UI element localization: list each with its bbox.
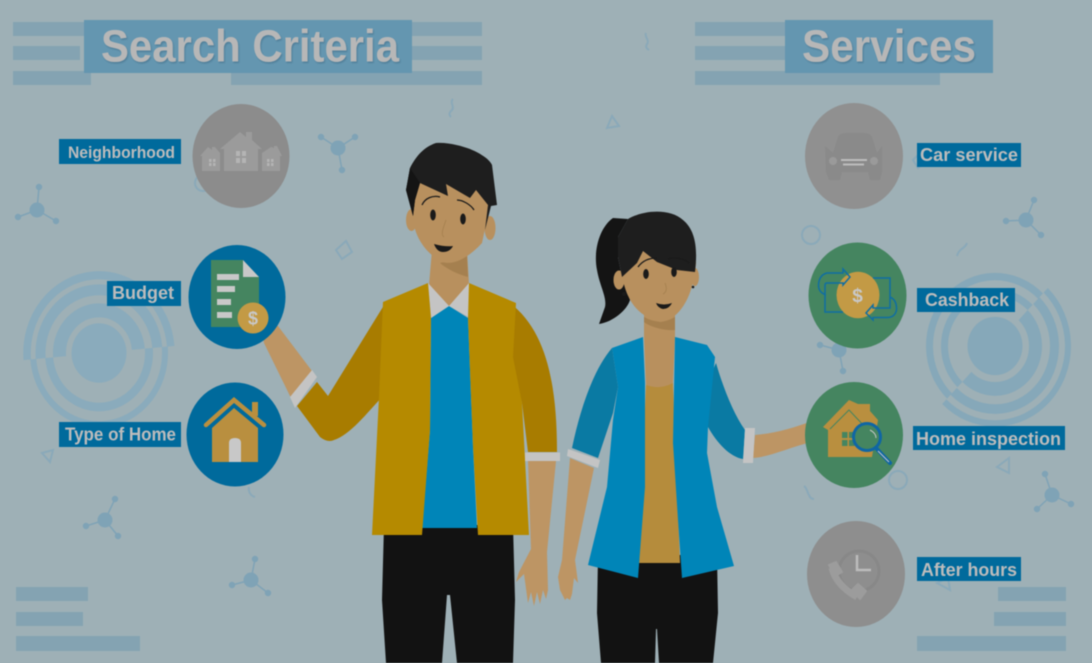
man: left sleeve [297,302,386,441]
man: eyebrows [422,196,474,210]
woman: left cuff [567,449,600,468]
label: Budget: Budget [112,283,174,303]
icon: budget [188,245,286,349]
woman: right jacket panel [673,337,734,578]
right decorative bars behind title [695,22,940,85]
label: Neighborhood [59,139,181,164]
woman: earrings [622,286,694,296]
icon: budget: $ [248,308,258,328]
woman: neck shadow [644,317,675,330]
icon: car service [805,103,903,209]
woman: eyes [643,267,677,279]
background decoration: right concentric rings [897,242,1092,455]
background decoration: left concentric rings [21,269,176,431]
man: face [414,170,491,263]
man: nose [442,220,446,237]
man: right sleeve [510,303,557,452]
man: raised arm [262,326,312,398]
icon: home inspection [805,382,903,488]
man figure [262,143,560,663]
icon: type of home [186,382,284,486]
woman: face [621,235,696,322]
icon: neighborhood [192,104,290,208]
woman: neck and chest [644,315,675,387]
woman: ponytail [596,218,630,324]
woman: top [639,383,680,563]
background decoration: small shapes [42,33,1009,590]
man: jacket left [372,283,431,535]
icon: cashback [808,242,906,348]
heading: Search Criteria: Search Criteria [101,20,400,72]
icon: cashback: $ [852,286,863,307]
left decorative bars behind title [13,22,482,85]
woman: right sleeve [700,363,745,459]
man: mouth [434,244,453,252]
woman: nose [663,283,666,294]
man: right forearm and hand [516,461,556,606]
label: Car service: Car service [920,145,1018,165]
woman: hair [618,212,696,277]
woman: left jacket panel [588,337,645,578]
man: neck [429,250,469,306]
label: Budget [107,281,181,306]
man: left cuff [290,370,317,408]
woman figure [558,212,812,663]
man: shirt [422,306,477,528]
woman: right arm [753,421,812,458]
woman: mouth [656,303,672,309]
man: right cuff [525,452,560,461]
icon: after hours [807,521,905,627]
bottom-left decorative bars [16,587,140,651]
woman: eyebrows [638,258,689,267]
woman: trousers [597,555,718,663]
man: hair [406,143,497,230]
man: trousers [382,525,515,663]
man: collar [428,283,470,318]
woman: right cuff [743,428,755,463]
bottom-right decorative bars [917,587,1066,651]
man: hair shadow [406,168,420,216]
woman: ears [614,268,699,290]
man: neck shadow [440,256,468,277]
man: eyes [430,210,466,224]
label: After hours: After hours [921,560,1017,580]
label: Cashback: Cashback [925,290,1010,310]
man: ears [406,209,496,240]
background decoration: molecules [15,134,1074,596]
label: Home inspection: Home inspection [916,429,1061,449]
woman: left arm and hand [558,458,594,600]
heading: Services: Services [802,20,976,72]
label: Neighborhood: Neighborhood [68,143,175,162]
label: Type of Home: Type of Home [65,424,176,444]
man: jacket right [468,283,529,535]
woman: left sleeve [572,348,618,458]
